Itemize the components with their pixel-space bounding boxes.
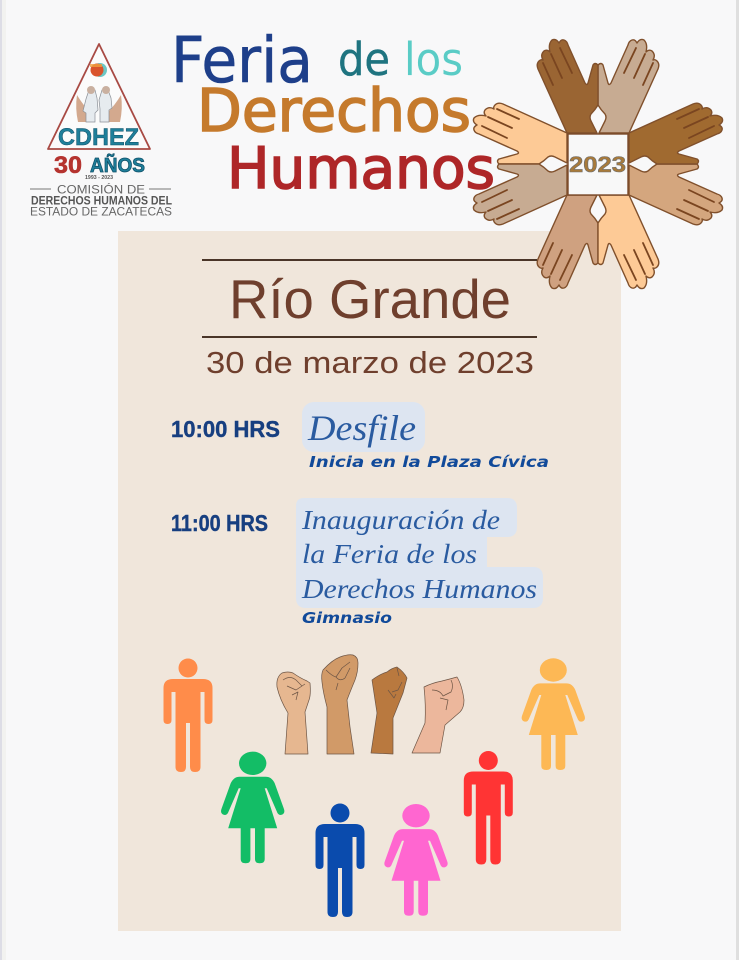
title word: Feria: Feria <box>171 24 313 97</box>
logo triangle <box>48 44 150 149</box>
logo hands and figures <box>76 86 122 122</box>
raised fists <box>277 655 464 754</box>
logo 30: 30 <box>54 152 82 179</box>
rule below city <box>202 336 537 338</box>
person: orange <box>164 658 212 772</box>
schedule item: 11:00 <box>171 498 543 627</box>
event name line 1: Inauguración de <box>301 505 500 535</box>
person: pink <box>384 804 448 916</box>
heading: city: Río Grande <box>229 268 511 330</box>
logo years: 1993 - 2023 <box>85 175 113 181</box>
title word: Humanos: Humanos <box>227 136 495 202</box>
highlight <box>302 402 425 452</box>
fist 1 <box>277 672 310 754</box>
fist 4 <box>412 677 464 753</box>
person: red <box>464 751 513 864</box>
logo: CDHEZ <box>30 44 172 218</box>
date: 30 de marzo de 2023 <box>206 345 534 380</box>
logo años: AÑOS <box>90 154 145 177</box>
title word: los: los <box>404 33 463 86</box>
event name: Desfile <box>307 408 416 448</box>
logo commission line 3: ESTADO DE ZACATECAS <box>30 206 172 218</box>
title word: Derechos: Derechos <box>197 76 471 145</box>
logo wordmark CDHEZ: CDHEZ <box>58 124 139 151</box>
person: green <box>221 752 284 863</box>
location: Inicia en la Plaza Cívica <box>309 453 549 471</box>
schedule item: 10:00 <box>171 402 549 471</box>
logo sun <box>90 63 107 77</box>
event name line 3: Derechos Humanos <box>301 574 537 604</box>
panel: event program <box>118 231 621 931</box>
year label: 2023 <box>569 152 626 177</box>
logo commission line 2: DERECHOS HUMANOS DEL <box>31 196 172 208</box>
logo commission name: COMISIÓN DE <box>57 182 145 196</box>
person: yellow <box>522 658 585 770</box>
event name line 2: la Feria de los <box>302 539 477 569</box>
location: Gimnasio <box>302 609 392 627</box>
icon: ring of hands 2023 <box>473 39 723 289</box>
time: 10:00 HRS <box>171 416 280 442</box>
fist 3 <box>371 667 407 754</box>
time: 11:00 HRS <box>171 510 268 536</box>
fist 2 <box>322 655 358 754</box>
rule above city <box>202 259 537 261</box>
title word: de: de <box>338 33 390 86</box>
highlight <box>296 498 543 608</box>
person: blue <box>316 804 364 917</box>
title <box>171 24 495 202</box>
